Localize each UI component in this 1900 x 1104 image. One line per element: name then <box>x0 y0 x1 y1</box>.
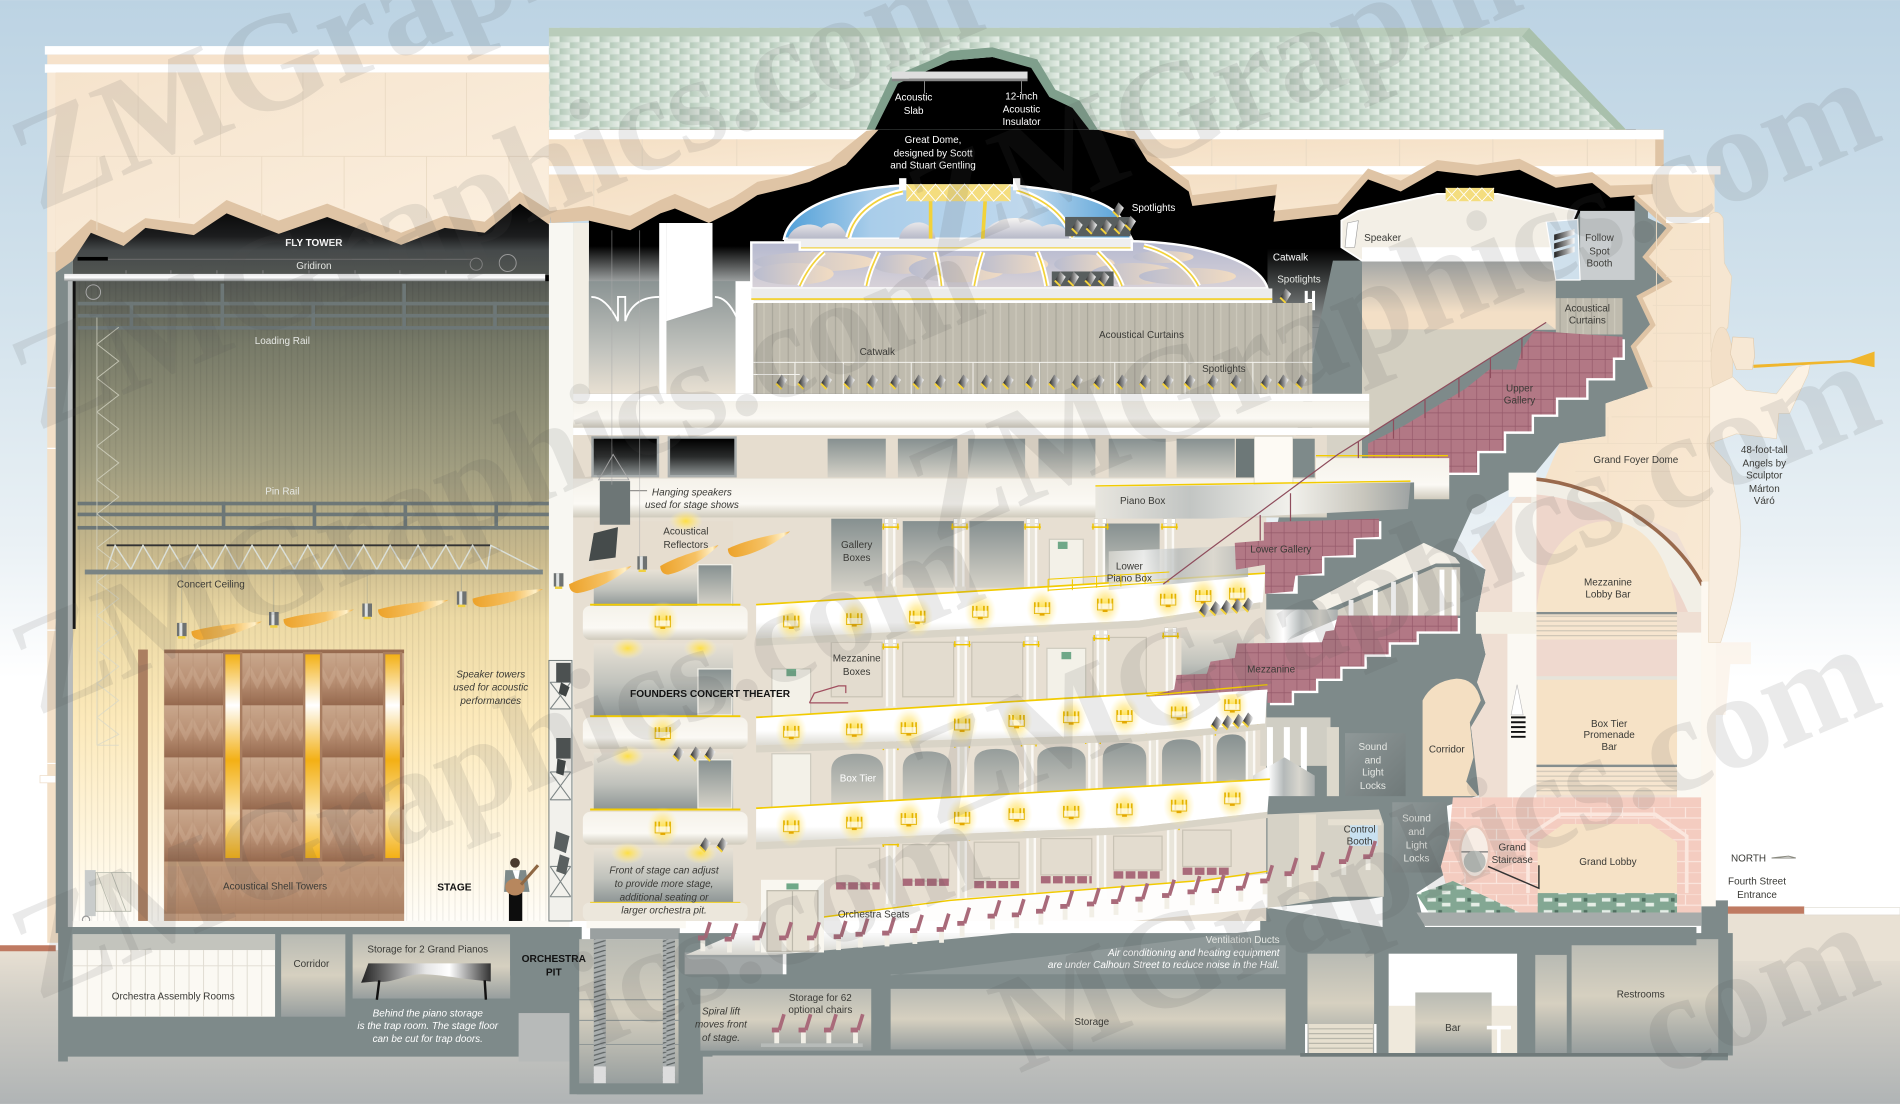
panel: acoustical curtains <box>754 303 1312 394</box>
text: restrooms: Restrooms <box>1617 989 1665 1000</box>
panel: control booth <box>1267 809 1384 909</box>
upper dome <box>784 178 1133 250</box>
text: concert ceiling: Concert Ceiling <box>177 580 245 591</box>
panel: storage <box>891 989 1286 1049</box>
text: control booth: Booth <box>1347 837 1373 848</box>
panel: orchestra level boxes <box>836 819 1231 911</box>
text: trap room note: can be cut for trap doors. <box>373 1034 483 1045</box>
text: catwalk right: Catwalk <box>1273 253 1308 264</box>
guitarist figure <box>504 858 538 921</box>
torn tan edge left facade <box>549 130 879 230</box>
panel: roof <box>549 28 1626 130</box>
text: fourth street entrance: Fourth Street <box>1728 877 1786 888</box>
text: corridor: Corridor <box>293 959 330 970</box>
text: acoustical reflectors: Acoustical <box>663 526 708 537</box>
text: speaker towers note: Speaker towers <box>456 669 525 680</box>
text: speaker towers note <box>453 669 528 707</box>
text: follow spot booth <box>1585 233 1615 270</box>
text: upper gallery: Upper <box>1506 383 1534 394</box>
text: locks lower: Light <box>1406 840 1428 851</box>
text: mezzanine boxes <box>833 654 881 678</box>
icon: speaker <box>1345 221 1358 247</box>
text: lower gallery: Lower Gallery <box>1250 545 1311 556</box>
text: small acoustical curtains: Acoustical <box>1565 303 1610 314</box>
text: orchestra pit: ORCHESTRA <box>522 954 587 965</box>
text: angels: 48-foot-tall <box>1741 445 1788 456</box>
panel: gallery boxes tier <box>831 519 1178 594</box>
text: lower piano box <box>1107 562 1152 585</box>
text: angels: Angels by <box>1742 459 1786 470</box>
catwalk railing <box>754 362 1312 394</box>
orchestra gold rail <box>776 871 1267 923</box>
pale wall shape <box>1716 642 1751 715</box>
panel: foyer interior <box>1471 473 1704 800</box>
text: promenade bar: Promenade <box>1584 730 1635 741</box>
panel: small acoustical curtains <box>1556 298 1623 334</box>
gridiron bar <box>64 255 550 299</box>
watermark: ics.com <box>551 767 1005 1075</box>
piano box <box>1095 456 1449 519</box>
text: orchestra assembly rooms: Orchestra Assembly Rooms <box>112 992 235 1003</box>
text: speaker towers note: used for acoustic <box>453 683 528 694</box>
text: trap room note: Behind the piano storage <box>373 1009 483 1020</box>
text: insulator label: Insulator <box>1002 117 1041 128</box>
text: insulator label: 12-inch <box>1005 91 1038 102</box>
text: gridiron: Gridiron <box>296 261 331 272</box>
panel: big gray structure behind seating <box>1260 212 1696 945</box>
balcony spotlights <box>1199 597 1254 731</box>
text: speaker: Speaker <box>1364 233 1402 244</box>
text: chair storage: Storage for 62 <box>789 993 852 1004</box>
text: great dome label <box>890 135 976 171</box>
watermark: ZMGraphics.com <box>0 485 1001 1029</box>
green carpet <box>1417 881 1677 912</box>
watermark: com <box>1614 872 1896 1104</box>
text: trap room note <box>357 1009 499 1045</box>
concert ceiling truss <box>85 545 543 574</box>
text: acoustical reflectors <box>663 526 708 551</box>
acoustic slab <box>892 72 1028 95</box>
text: storage: Storage <box>1074 1017 1110 1028</box>
text: locks upper: Sound <box>1359 742 1387 753</box>
sky background <box>0 0 1900 679</box>
side truss <box>97 318 119 745</box>
text: follow spot booth: Follow <box>1585 233 1615 244</box>
text: spiral lift note: moves front <box>695 1020 748 1031</box>
text: speaker towers note: performances <box>459 696 521 707</box>
text: gallery boxes: Gallery <box>841 540 872 551</box>
text: acoustical curtains: Acoustical Curtains <box>1099 330 1184 341</box>
balcony fronts <box>756 573 1270 849</box>
text: great dome label: and Stuart Gentling <box>890 160 976 171</box>
text: orchestra seats: Orchestra Seats <box>838 909 910 920</box>
stair railing <box>1163 322 1546 584</box>
frieze windows <box>591 436 1315 485</box>
panel: follow spot booth <box>1546 211 1635 280</box>
panel: stair room <box>1306 954 1375 1053</box>
panel: fly tower exterior wall <box>40 46 549 943</box>
mezzanine front lanterns <box>776 685 1248 753</box>
stone facade left <box>549 130 876 223</box>
text: orchestra pit: PIT <box>546 968 562 979</box>
text: promenade bar: Box Tier <box>1591 719 1628 730</box>
panel: speaker section at rear <box>1312 188 1576 485</box>
text: box tier: Box Tier <box>840 774 877 785</box>
text: spotlights top: Spotlights <box>1132 203 1175 214</box>
text: locks lower <box>1402 814 1431 865</box>
text: bar: Bar <box>1445 1023 1461 1034</box>
lower dome <box>751 241 1272 304</box>
pin rail <box>78 502 550 530</box>
text: fourth street entrance <box>1728 877 1786 901</box>
panel: mezzanine boxes tier <box>772 628 1254 720</box>
text: hanging speakers note: Hanging speakers <box>652 488 732 499</box>
text: ventilation note: Air conditioning and heating equipment <box>1107 948 1281 959</box>
text: front of stage note: larger orchestra pit. <box>621 906 707 917</box>
panel: storage for chairs <box>700 989 871 1051</box>
panel: fly tower interior <box>56 73 550 933</box>
panel: speaker towers <box>549 660 572 921</box>
text: angels: Márton <box>1749 484 1780 495</box>
panel: lift shaft <box>570 921 703 1094</box>
text: trap room note: is the trap room. The stage floor <box>357 1021 499 1032</box>
text: locks upper: Locks <box>1360 781 1386 792</box>
text: front of stage note: to provide more stage, <box>615 879 713 890</box>
orchestra seats <box>698 841 1375 952</box>
panel: corridor right <box>1423 679 1481 796</box>
watermark: ZMGraphics.com <box>887 27 1897 571</box>
panel: understage structure <box>58 927 712 1062</box>
north arrow <box>1772 856 1796 858</box>
text: mezzanine boxes: Boxes <box>843 667 871 678</box>
panel: proscenium strip and back wall <box>549 223 754 921</box>
text: hanging speakers note <box>645 488 739 511</box>
roof dark green tear rim <box>866 47 1098 130</box>
panel: grand lobby brickwork <box>1441 797 1701 912</box>
text: spiral lift note <box>695 1006 748 1044</box>
floor line <box>1300 1053 1728 1057</box>
text: front of stage note: Front of stage can adjust <box>609 866 720 877</box>
pale right pilaster <box>1701 582 1716 906</box>
text: ventilation note: Ventilation Ducts <box>1206 935 1280 946</box>
panel: lower orchestra structure <box>679 900 1733 1060</box>
panel: box tier arches <box>772 717 1339 814</box>
text: grand staircase: Staircase <box>1492 855 1533 866</box>
gallery front lanterns <box>776 573 1253 642</box>
text: mezzanine boxes: Mezzanine <box>833 654 881 665</box>
text: spiral lift note: Spiral lift <box>702 1006 741 1017</box>
icon: grand piano <box>361 963 491 1000</box>
text: insulator label: Acoustic <box>1003 105 1040 116</box>
text: roof and dome labels: Slab <box>904 106 924 117</box>
icon: trumpeting angel statue <box>1709 212 1875 642</box>
icon: optional chairs <box>761 1014 863 1047</box>
text: fly tower heading: FLY TOWER <box>285 238 342 249</box>
text: grand staircase <box>1492 843 1533 866</box>
torn stone face, fly tower <box>47 73 550 252</box>
text: promenade bar: Bar <box>1601 742 1618 753</box>
acoustical shell towers <box>138 650 404 921</box>
catwalk spotlights row <box>776 374 1307 389</box>
text: mezzanine lobby bar <box>1584 577 1632 600</box>
text: mezzanine lobby bar: Lobby Bar <box>1585 589 1631 600</box>
orchestra seating floor <box>686 874 1383 955</box>
text: angels: Váró <box>1754 496 1775 507</box>
text: upper gallery <box>1504 383 1535 407</box>
text: front of stage note <box>609 866 720 917</box>
mezzanine seating <box>1146 616 1460 705</box>
text: promenade bar <box>1584 719 1635 753</box>
text: mezzanine: Mezzanine <box>1247 665 1296 676</box>
text: front of stage note: additional seating or <box>620 892 709 903</box>
text: lower piano box: Lower <box>1116 562 1144 573</box>
concert ceiling reflectors <box>177 574 543 640</box>
text: acoustical reflectors: Reflectors <box>664 540 708 551</box>
text: locks lower: Sound <box>1402 814 1431 825</box>
lower piano box <box>1048 545 1248 591</box>
panel: ventilation ducts <box>891 927 1286 976</box>
text: angels <box>1741 445 1788 507</box>
panel: orchestra assembly rooms <box>73 934 275 1017</box>
text: corridor right: Corridor <box>1429 745 1465 756</box>
watermark: ZMGraphics.com <box>887 310 1897 854</box>
upper gallery seating <box>1368 331 1625 475</box>
lower gallery seating <box>1235 519 1381 594</box>
text: loading rail: Loading Rail <box>255 336 310 347</box>
panel: sound and light locks upper <box>1345 733 1406 796</box>
orchestra door <box>761 880 824 952</box>
panel: bar <box>1389 954 1517 1053</box>
lobby floor slab <box>1417 912 1701 926</box>
roof tear: black void <box>872 57 1094 130</box>
text: grand foyer dome: Grand Foyer Dome <box>1593 455 1679 466</box>
mezzanine colonnade <box>1265 543 1460 679</box>
text: piano box: Piano Box <box>1120 496 1165 507</box>
text: locks upper: and <box>1365 755 1381 766</box>
text: ventilation note: are under Calhoun Street to reduce noise in the Hall. <box>1048 960 1280 971</box>
text: follow spot booth: Spot <box>1589 247 1610 258</box>
text: orchestra pit <box>522 954 587 979</box>
text: locks upper <box>1359 742 1387 792</box>
text: great dome label: Great Dome, <box>905 135 961 146</box>
black void behind torn facade <box>589 130 1648 400</box>
text: grand staircase: Grand <box>1498 843 1526 854</box>
text: gallery boxes: Boxes <box>843 553 871 564</box>
text: pin rail: Pin Rail <box>265 486 299 497</box>
panel: restrooms <box>1572 939 1718 1053</box>
text: roof and dome labels <box>895 93 932 117</box>
text: ventilation note <box>1048 935 1281 971</box>
text: grand lobby: Grand Lobby <box>1579 857 1637 868</box>
hanging speakers <box>589 230 647 561</box>
panel: narrow room <box>1535 955 1567 1053</box>
acoustical reflectors over hall <box>554 531 791 594</box>
panel: orchestra pit <box>510 927 582 976</box>
text: locks upper: Light <box>1362 768 1384 779</box>
text: hanging speakers note: used for stage shows <box>645 500 739 511</box>
text: follow spot booth: Booth <box>1587 259 1612 270</box>
text: small acoustical curtains: Curtains <box>1569 316 1606 327</box>
panel: sound and light locks lower <box>1392 802 1447 873</box>
panel: outer stone wall right <box>1545 175 1715 582</box>
stage floor <box>73 921 570 927</box>
text: small acoustical curtains <box>1565 303 1610 327</box>
text: piano storage: Storage for 2 Grand Pianos <box>367 944 488 955</box>
stone facade right <box>1098 130 1721 211</box>
watermark: ZMGraphics.com <box>0 200 1001 744</box>
panel: hall frieze and walls <box>573 394 1369 921</box>
watermark: MGraphics.com <box>971 593 1897 1101</box>
box tier front lanterns <box>776 778 1248 847</box>
text: spotlights right: Spotlights <box>1277 274 1321 285</box>
text: catwalk left: Catwalk <box>860 347 895 358</box>
text: control booth: Control <box>1344 825 1376 836</box>
text: theater heading: FOUNDERS CONCERT THEATER <box>630 689 791 700</box>
text: spotlights catwalk: Spotlights <box>1202 364 1246 375</box>
text: roof and dome labels: Acoustic <box>895 93 932 104</box>
spotlights on dome <box>1052 202 1314 310</box>
text: control booth <box>1344 825 1376 848</box>
text: locks lower: and <box>1408 827 1425 838</box>
text: chair storage: optional chairs <box>788 1005 852 1016</box>
loading rail <box>78 284 550 330</box>
text: angels: Sculptor <box>1746 471 1783 482</box>
text: great dome label: designed by Scott <box>894 148 973 159</box>
torn tan edge right facade <box>1098 130 1721 222</box>
text: upper gallery: Gallery <box>1504 396 1535 407</box>
panel: proscenium boxes left <box>583 510 748 921</box>
panel: corridor <box>281 934 345 1017</box>
text: chair storage <box>788 993 852 1016</box>
text: fourth street entrance: Entrance <box>1737 890 1777 901</box>
text: locks lower: Locks <box>1404 854 1430 865</box>
text: gallery boxes <box>841 540 872 564</box>
panel: piano storage <box>353 934 510 999</box>
text: north: NORTH <box>1731 854 1766 865</box>
small rolling cart <box>82 870 131 923</box>
text: insulator label <box>1002 91 1041 128</box>
text: mezzanine lobby bar: Mezzanine <box>1584 577 1632 588</box>
text: spiral lift note: of stage. <box>702 1033 740 1044</box>
text: acoustical shell towers: Acoustical Shell Towers <box>223 881 327 892</box>
text: stage: STAGE <box>437 883 472 894</box>
text: lower piano box: Piano Box <box>1107 574 1152 585</box>
ground <box>0 906 1900 1104</box>
